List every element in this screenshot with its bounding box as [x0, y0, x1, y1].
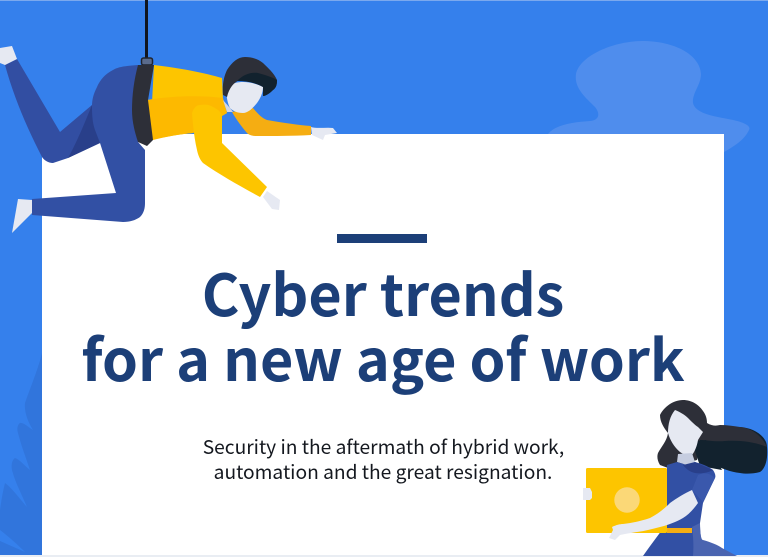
far arm	[232, 108, 311, 136]
folder tab	[583, 488, 592, 500]
illustration: hanging man	[0, 0, 337, 233]
subtitle: Security in the aftermath of hybrid work,	[203, 432, 564, 460]
neck	[677, 453, 695, 465]
head	[227, 82, 263, 113]
subtitle	[203, 432, 564, 485]
near arm	[192, 105, 267, 197]
hair	[223, 57, 277, 97]
accent bar	[337, 234, 427, 243]
face	[668, 410, 703, 455]
dress collar	[683, 462, 713, 473]
illustration: woman with folder	[583, 400, 767, 556]
white panel	[42, 134, 724, 556]
sweater	[150, 65, 227, 140]
arm	[609, 490, 698, 540]
folder	[586, 468, 667, 533]
back shoe	[0, 46, 17, 65]
background blob	[548, 41, 749, 152]
near leg	[32, 65, 145, 222]
far leg	[5, 59, 100, 163]
harness clip	[142, 58, 152, 65]
hair back	[690, 425, 767, 474]
folder circle	[614, 487, 640, 513]
front shoe	[12, 199, 32, 233]
dress skirt	[692, 523, 737, 556]
title	[81, 249, 685, 398]
neck	[223, 100, 233, 112]
near hand	[263, 191, 280, 210]
far hand	[311, 127, 337, 140]
dress	[643, 462, 737, 556]
subtitle: automation and the great resignation.	[214, 457, 552, 485]
sleeve	[692, 473, 715, 502]
rope	[145, 0, 148, 58]
background leaf	[0, 353, 42, 555]
folder base	[667, 528, 692, 533]
title: for a new age of work	[81, 314, 685, 398]
title: Cyber trends	[202, 249, 564, 333]
harness belt	[132, 65, 154, 146]
